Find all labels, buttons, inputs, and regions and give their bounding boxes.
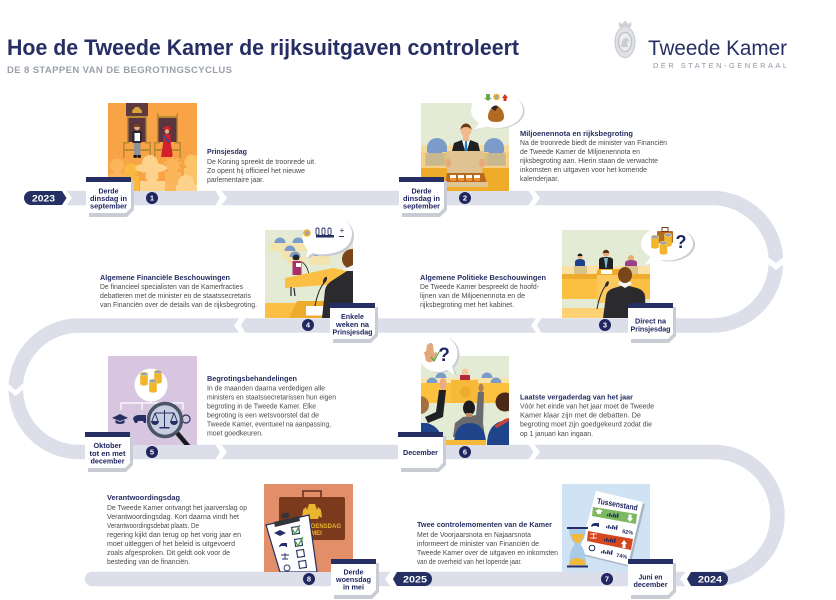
- illustration: debate from behind: [562, 226, 695, 318]
- panel: step 2 Miljoenennota: [399, 92, 667, 217]
- text: step 4: [100, 273, 257, 309]
- text: step 1: [207, 147, 316, 184]
- illustration: interim report and hourglass: [562, 484, 650, 572]
- text: step 6: begroting moet zijn goedgekeurd zodat die: [520, 422, 652, 428]
- subtitle: DE 8 STAPPEN VAN DE BEGROTINGSCYCLUS: [7, 65, 232, 76]
- panel: step 1 Prinsjesdag: [86, 103, 316, 217]
- number 8: [303, 573, 315, 585]
- text: step 8: [107, 493, 247, 566]
- panel: step 4 Algemene Financiële Beschouwingen: [100, 219, 378, 343]
- row icons and values: 62%: [622, 529, 634, 537]
- number 4: [302, 319, 314, 331]
- logo: Tweede Kamer: [615, 20, 787, 70]
- text: step 2: [520, 129, 667, 183]
- date card 1: Derde: [98, 186, 118, 196]
- text: step 1: Zo opent hij officieel het nieuwe: [207, 168, 305, 175]
- number 2: [459, 192, 471, 204]
- text: step 8: Verantwoordingsdag: [107, 493, 180, 502]
- badge: 2025: 2025: [403, 574, 428, 586]
- number 1: 1: [150, 194, 154, 203]
- logo wordmark: Tweede Kamer: [648, 36, 787, 60]
- text: step 1: parlementaire jaar.: [207, 177, 264, 184]
- timeline track: [7, 190, 784, 587]
- text: step 5: [207, 374, 336, 438]
- number 8: 8: [307, 575, 311, 584]
- text: step 2: rijksbegroting aan. Hierin staan de verwachte: [520, 158, 658, 165]
- date card 4: [330, 303, 378, 343]
- text: step 2: Na de troonrede biedt de minister van Financiën: [520, 140, 667, 147]
- illustration: briefcase and checklist: WOENSDAG: [305, 523, 341, 530]
- number 5: [146, 446, 158, 458]
- text: step 4: debatteren met de minister en de staatssecretaris: [100, 293, 251, 300]
- text: step 5: ministers en staatssecretarissen hun eigen: [207, 394, 336, 402]
- badge: 2024: 2024: [698, 574, 723, 586]
- date card 4: Enkele: [341, 312, 364, 321]
- speech bubble: ?: [676, 232, 686, 252]
- figure: hand raiser left: [421, 378, 446, 432]
- text: step 5: begroting is een wetsvoorstel dat de: [207, 412, 319, 420]
- date card 8: Derde: [344, 568, 364, 576]
- icon: graduation cap: [112, 414, 128, 424]
- date card 7: Juni en: [638, 572, 663, 582]
- figure: person right: [487, 392, 509, 445]
- panel: step 3 Algemene Politieke Beschouwingen: [420, 226, 695, 343]
- text: step 5: Tweede Kamer, eventueel na aanpassing,: [207, 422, 331, 428]
- figure: speaker from behind: [603, 267, 646, 318]
- text: step 6: Kamer klaar zijn met de debatten. De: [520, 412, 641, 420]
- text: step 3: lijnen van de Miljoenennota en de: [420, 293, 525, 300]
- date card 5: december: [90, 456, 125, 466]
- text: step 4: van Financiën over de details van de rijksbegroting.: [100, 302, 257, 309]
- date card 1: [86, 177, 134, 217]
- text: step 4: Algemene Financiële Beschouwingen: [100, 273, 230, 282]
- crest on briefcase: [302, 504, 322, 519]
- figure: minister: [452, 124, 480, 151]
- title: Hoe de Tweede Kamer de rijksuitgaven controleert: [7, 35, 519, 60]
- text: step 6: [520, 392, 654, 438]
- icon: magnifier with scales: [148, 404, 189, 447]
- text: step 6: Vóór het einde van het jaar moet de Tweede: [520, 404, 654, 410]
- text: step 8: Verantwoordingsdebat plaats. De: [107, 523, 199, 530]
- date card 7: december: [634, 580, 668, 589]
- date card 8: [331, 559, 379, 599]
- text: step 7: Tweede Kamer over de uitgaven en inkomsten: [417, 550, 558, 557]
- badge: 2025: [393, 572, 432, 586]
- speech bubble: +: [340, 226, 345, 235]
- text: step 7: informeert de minister van Financiën de: [417, 541, 539, 548]
- text: step 6: Laatste vergaderdag van het jaar: [520, 392, 633, 402]
- text: step 5: begroting in de Tweede Kamer. Elke: [207, 404, 316, 410]
- date card 5: [85, 432, 133, 472]
- badge: 2023: 2023: [32, 194, 55, 204]
- text: step 1: Prinsjesdag: [207, 147, 247, 156]
- text: step 8: Verantwoordingsdag. Kort daarna vindt het: [107, 514, 239, 521]
- text: step 3: rijksbegroting met het kabinet.: [420, 302, 514, 309]
- text: step 2: inkomsten en uitgaven voor het komende: [520, 167, 647, 174]
- number 1: [146, 192, 158, 204]
- text: step 7: Twee controlemomenten van de Kamer: [417, 520, 552, 529]
- text: step 1: De Koning spreekt de troonrede uit.: [207, 159, 316, 166]
- number 3: 3: [603, 321, 607, 330]
- date card 6: [398, 432, 446, 472]
- number 6: 6: [463, 448, 467, 457]
- number 4: 4: [306, 321, 311, 330]
- panel: step 5 Begrotingsbehandelingen: [85, 356, 336, 472]
- icon: mug: [182, 415, 190, 423]
- logo subtitle: DER STATEN-GENERAAL: [653, 61, 787, 70]
- text: step 5: moet goedkeuren.: [207, 430, 263, 438]
- date card 8: in mei: [343, 582, 364, 592]
- panel: step 6 Laatste vergaderdag: [398, 335, 654, 472]
- number 5: 5: [150, 448, 154, 457]
- checklist: [266, 512, 317, 572]
- illustration: coins and magnifier: [108, 356, 197, 447]
- number 2: 2: [463, 194, 467, 203]
- date card 5: tot en met: [90, 449, 126, 458]
- illustration: throne room: [107, 103, 200, 193]
- number 7: 7: [605, 575, 609, 584]
- icon: crest: [615, 20, 635, 58]
- report sheet: [579, 491, 645, 567]
- panel: step 8 Verantwoordingsdag: [107, 484, 379, 599]
- figure: queen: [161, 126, 173, 157]
- row icons and values: [589, 509, 634, 561]
- badge: 2023: [24, 191, 66, 205]
- figure: hand raiser middle: [453, 384, 486, 445]
- date card 4: weken na: [335, 320, 370, 329]
- figure: king: [132, 124, 142, 158]
- speech bubble: ?: [438, 345, 450, 366]
- panel: step 7 Twee controlemomenten: [417, 484, 676, 599]
- text: step 7: van de overheid van het lopende jaar.: [417, 559, 522, 566]
- date card 2: Derde: [412, 186, 432, 196]
- text: step 3: Algemene Politieke Beschouwingen: [420, 273, 546, 282]
- row icons and values: 74%: [616, 553, 628, 561]
- date card 5: Oktober: [94, 441, 122, 450]
- illustration: raised hands in chamber: [421, 337, 509, 445]
- text: step 2: kalenderjaar.: [520, 176, 559, 183]
- date card 3: [628, 303, 676, 343]
- text: step 8: regering kijkt dan terug op het vorig jaar en: [107, 532, 241, 539]
- figure: man from behind: [322, 249, 353, 318]
- icon: cow: [133, 415, 146, 423]
- date card 3: Prinsjesdag: [630, 324, 671, 334]
- text: step 2: de Tweede Kamer de Miljoenennota en: [520, 149, 640, 156]
- text: step 4: De financieel specialisten van de Kamerfracties: [100, 284, 243, 291]
- text: step 3: De Tweede Kamer bespreekt de hoofd-: [420, 284, 540, 291]
- tray: [446, 173, 486, 182]
- crowd: [107, 154, 200, 193]
- date card 8: woensdag: [335, 575, 371, 584]
- text: step 5: Begrotingsbehandelingen: [207, 374, 297, 383]
- badge: 2024: [687, 572, 728, 586]
- text: step 6: op 1 januari kan ingaan.: [520, 431, 593, 438]
- illustration: briefcase and checklist: [264, 484, 353, 572]
- illustration: minister with book: [421, 92, 524, 191]
- number 7: [601, 573, 613, 585]
- illustration: briefcase and checklist: MEI: [311, 531, 322, 537]
- text: step 8: zoals afgesproken. Dit geldt ook voor de: [107, 550, 230, 557]
- text: step 2: Miljoenennota en rijksbegroting: [520, 129, 633, 138]
- text: step 8: moet uitleggen of het beleid is uitgevoerd: [107, 541, 235, 548]
- date card 2: september: [403, 202, 440, 210]
- date card 6: December: [403, 448, 438, 457]
- text: step 5: In de maanden daarna verdedigen alle: [207, 386, 325, 392]
- date card 2: dinsdag in: [403, 194, 440, 203]
- hourglass: [567, 527, 588, 568]
- text: step 8: De Tweede Kamer ontvangt het jaarverslag op: [107, 505, 247, 512]
- date card 4: Prinsjesdag: [332, 328, 373, 336]
- text: step 7: [417, 520, 558, 566]
- number 6: [459, 446, 471, 458]
- text: step 8: besteding van de financiën.: [107, 559, 190, 566]
- date card 1: september: [90, 202, 127, 210]
- date card 3: Direct na: [635, 316, 667, 326]
- text: step 3: [420, 273, 546, 309]
- figure: speaker woman: [292, 254, 302, 275]
- date card 2: [399, 177, 447, 217]
- date card 1: dinsdag in: [90, 194, 127, 203]
- number 3: [599, 319, 611, 331]
- speech bubble: [471, 92, 524, 131]
- report sheet: Tussenstand: [596, 497, 638, 513]
- date card 7: [628, 559, 676, 599]
- text: step 7: Met de Voorjaarsnota en Najaarsnota: [417, 532, 531, 539]
- book: [447, 151, 483, 173]
- illustration: financial debate: [265, 221, 354, 318]
